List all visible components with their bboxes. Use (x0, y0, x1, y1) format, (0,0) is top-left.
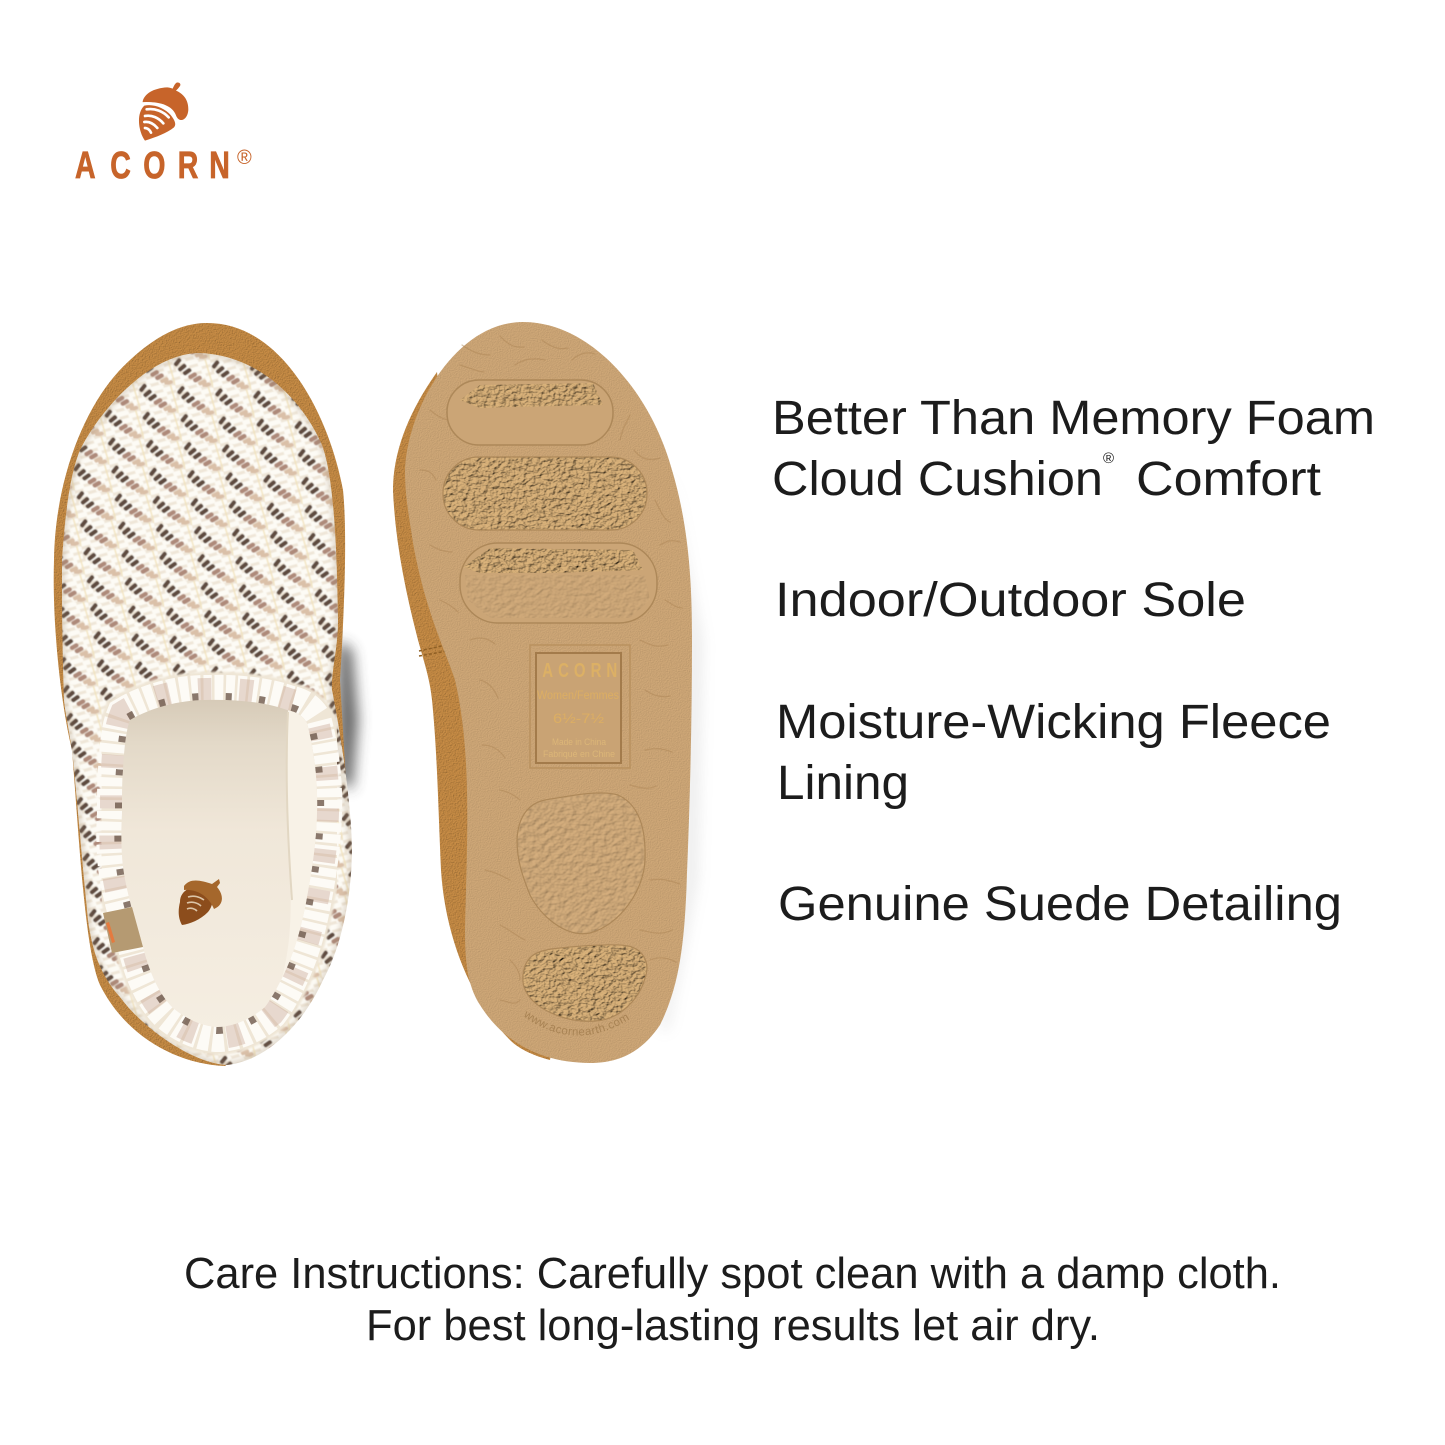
size stamp (530, 645, 630, 768)
stamp origin french: Fabriqué en Chine (543, 749, 615, 759)
stamp origin: Made in China (552, 737, 606, 747)
icon: acorn (139, 83, 188, 141)
icon: embroidered acorn (179, 879, 222, 925)
stamp size label: Women/Femmes (537, 688, 619, 702)
fleece side lining (283, 710, 318, 976)
feature: suede: Genuine Suede Detailing (778, 878, 1342, 931)
sole impressed marks (420, 336, 682, 1003)
collar: dark flecks (121, 700, 317, 1027)
orange tab sliver (106, 922, 115, 943)
collar: rope stitches (121, 700, 317, 1027)
logo: Acorn brand (75, 83, 252, 187)
tread pad 1 (447, 380, 613, 445)
suede outsole rim (54, 323, 350, 1066)
rubber outsole (405, 322, 692, 1063)
stamp size: 6½-7½ (553, 710, 604, 726)
tread pad 2 (443, 457, 647, 530)
right slipper: sole view (393, 322, 692, 1063)
feature list (772, 392, 1375, 931)
feature: cushion line 2: Comfort (1136, 453, 1321, 506)
suede side visible behind sole (393, 372, 560, 1060)
heel pad 5 (523, 945, 647, 1021)
feature: lining line 1: Moisture-Wicking Fleece (776, 696, 1331, 749)
side seam stitching (419, 645, 447, 656)
feature: sole: Indoor/Outdoor Sole (775, 574, 1246, 627)
soft shadow of sole (660, 470, 702, 1030)
feature: cushion line 2: ® (1103, 450, 1114, 467)
left slipper: top view (50, 323, 360, 1070)
feature: cushion line 2: Cloud Cushion (772, 453, 1103, 506)
feature: cushion line 1: Better Than Memory Foam (772, 392, 1375, 445)
collar base (121, 700, 317, 1027)
care line 1: Care Instructions: Carefully spot clean with a damp cloth. (184, 1249, 1281, 1298)
care line 2: For best long-lasting results let air dry. (366, 1301, 1100, 1350)
feature: cushion line 2 (772, 450, 1321, 506)
registered mark: ® (237, 147, 252, 169)
fleece insole (121, 700, 318, 1027)
collar: pink and tan flecks (121, 700, 317, 1027)
tread pad 3 (460, 543, 657, 623)
feature: lining line 2: Lining (777, 757, 909, 810)
suede heel tab (103, 907, 143, 953)
wordmark: ACORN (75, 145, 230, 187)
website imprint: www.acornearth.com (524, 1011, 629, 1036)
shadow behind slipper (338, 640, 358, 790)
care instructions (184, 1249, 1281, 1350)
knit upper (50, 340, 360, 1070)
stamp brand: ACORN (542, 659, 617, 682)
heel pad 4 (517, 793, 645, 934)
